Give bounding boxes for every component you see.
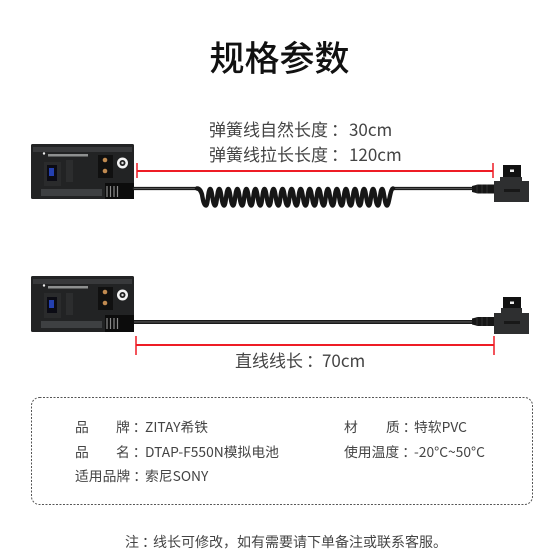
label: straight cable length: 70cm <box>322 347 365 372</box>
connector: bottom <box>472 297 529 334</box>
panel: specifications: 牌： <box>116 416 147 436</box>
label: coiled cable lengths <box>209 116 402 166</box>
panel: specifications: 品 <box>75 441 89 461</box>
title: 规格参数 <box>209 31 350 82</box>
panel: specifications: -20°C~50°C <box>414 441 485 461</box>
battery: bottom <box>31 276 134 332</box>
panel: specifications: DTAP-F550N模拟电池 <box>145 441 279 461</box>
panel: specifications: 使用温度： <box>344 441 416 461</box>
panel: specifications: 名： <box>116 441 147 461</box>
label: coiled cable lengths: 弹簧线拉长长度： <box>209 141 348 166</box>
footnote: 线长可修改，如有需要请下单备注或联系客服。 <box>153 532 447 552</box>
coiled cable <box>134 188 472 206</box>
label: coiled cable lengths: 弹簧线自然长度： <box>209 116 348 141</box>
label: coiled cable lengths: 120cm <box>349 141 402 166</box>
label: straight cable length: 直线线长： <box>235 347 323 372</box>
panel: specifications: 特软PVC <box>414 416 467 436</box>
panel: specifications: 索尼SONY <box>145 465 209 485</box>
panel: specifications: ZITAY希铁 <box>145 416 208 436</box>
footnote: 注： <box>125 532 156 552</box>
straight cable <box>134 320 472 324</box>
red dimension line: straight cable <box>136 336 494 355</box>
connector: top <box>472 165 529 202</box>
panel: specifications: 材 <box>344 416 358 436</box>
panel: specifications <box>32 398 532 504</box>
red dimension line: coiled cable <box>137 163 493 178</box>
panel: specifications: 适用品牌： <box>75 465 147 485</box>
panel: specifications: 品 <box>75 416 89 436</box>
panel: specifications: 质： <box>386 416 417 436</box>
battery: top <box>31 144 134 199</box>
label: coiled cable lengths: 30cm <box>349 116 392 141</box>
